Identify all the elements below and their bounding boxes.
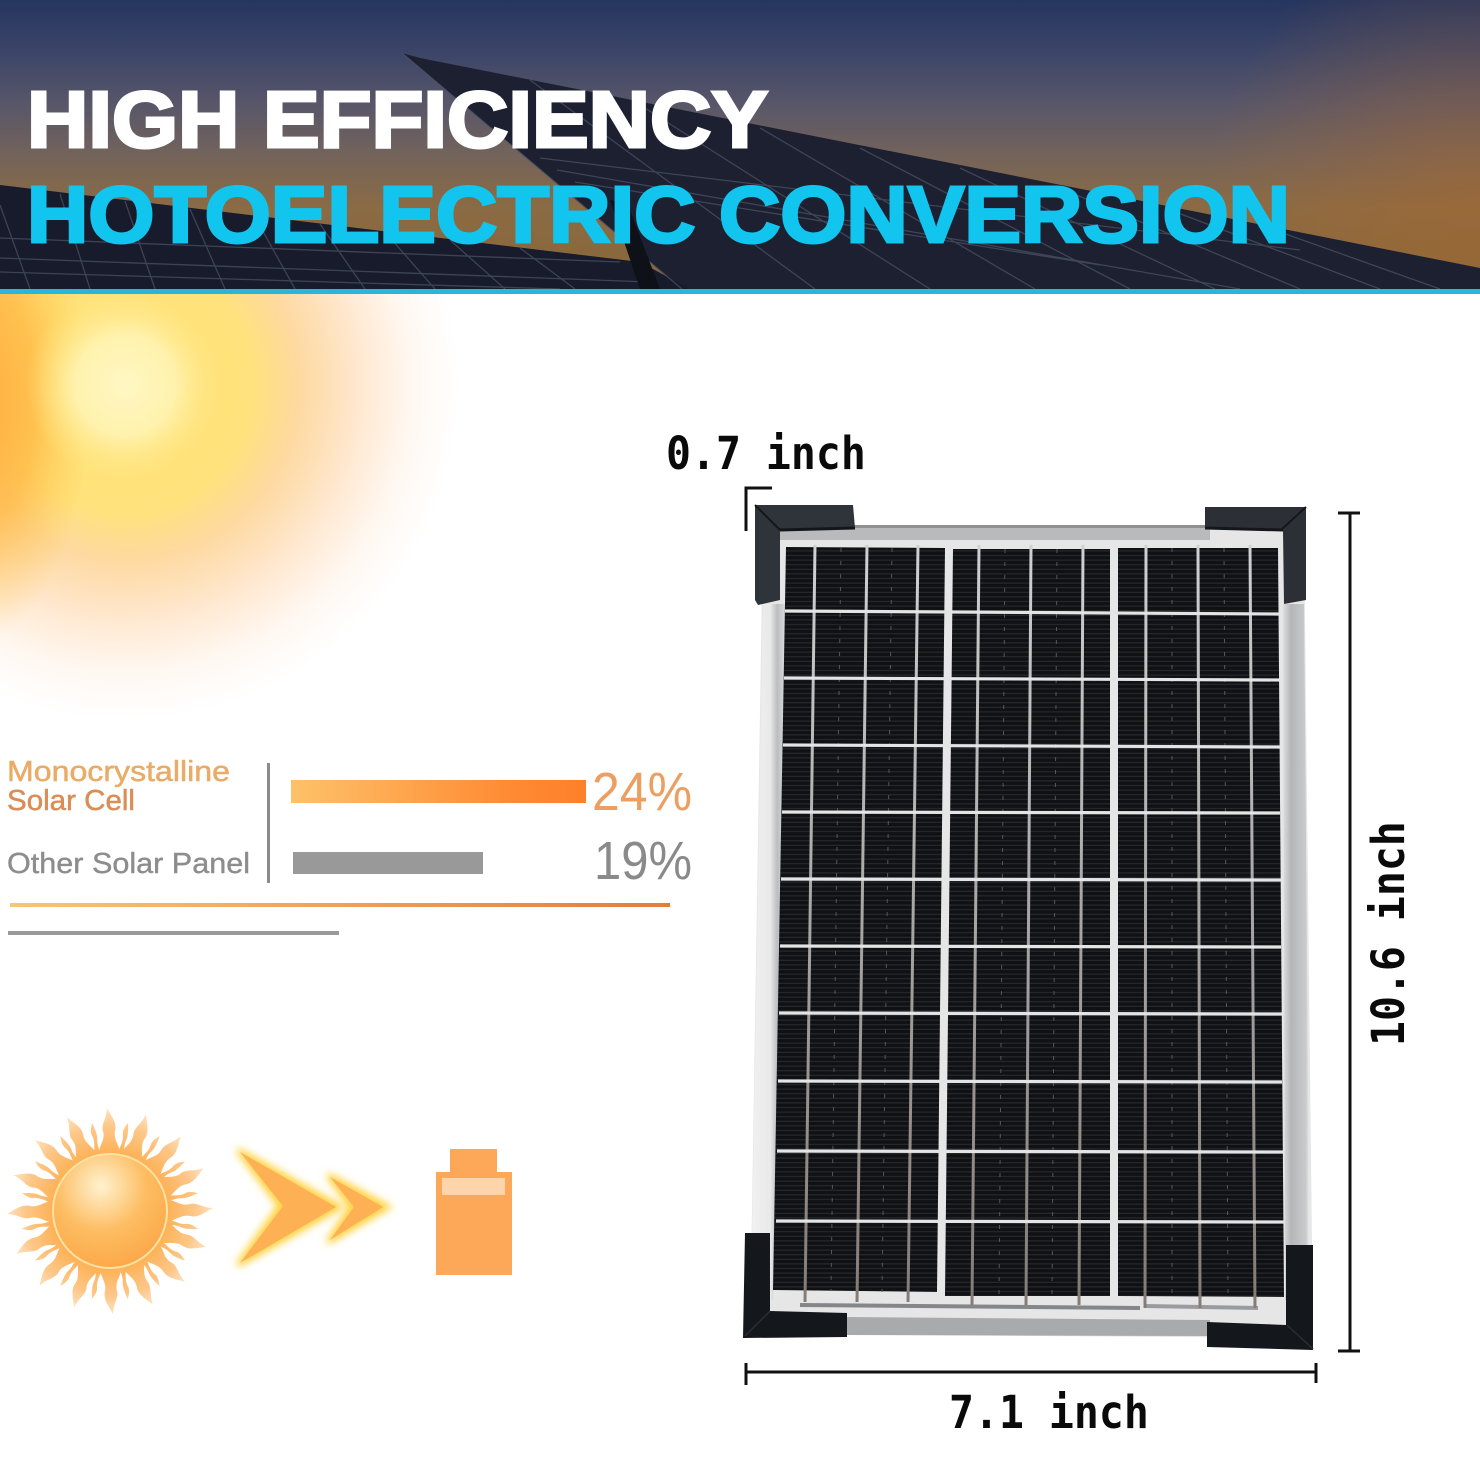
- value: 24%: 24%: [592, 762, 692, 822]
- sky background: [0, 0, 1480, 289]
- chart axis: [267, 763, 270, 883]
- dimension label: 10.6 inch: 10.6 inch: [1363, 821, 1416, 1046]
- corner bracket: bottom left: [743, 1233, 847, 1338]
- dimension: height line: [1338, 513, 1360, 1351]
- icon: sun: [7, 1108, 213, 1314]
- header banner: [0, 0, 1480, 289]
- label: monocrystalline: Monocrystalline: [7, 756, 230, 788]
- header cyan rule: [0, 289, 1480, 294]
- corner bracket: top right: [1205, 507, 1306, 604]
- corner bracket: bottom right: [1207, 1245, 1313, 1350]
- panel frame: [750, 525, 1313, 1338]
- value: 19%: 19%: [594, 831, 692, 891]
- bar: monocrystalline: [291, 780, 586, 803]
- underline: gray: [8, 931, 339, 935]
- solar array silhouettes: [0, 53, 1480, 289]
- icon: battery: [436, 1149, 512, 1275]
- dimension label: 0.7 inch: 0.7 inch: [666, 428, 866, 481]
- busbars: [805, 545, 1255, 1308]
- label: solar cell: Solar Cell: [7, 785, 135, 817]
- photovoltaic cells: [773, 547, 1284, 1297]
- dimension label: 7.1 inch: 7.1 inch: [949, 1387, 1149, 1440]
- dimension: thickness bracket: [746, 488, 772, 531]
- solar panel photo: [743, 505, 1313, 1350]
- cell separators: [776, 611, 1284, 1222]
- dimension: width line: [746, 1363, 1316, 1385]
- corner bracket: top left: [755, 505, 855, 605]
- efficiency comparison chart: [7, 756, 692, 935]
- title line 1: HIGH EFFICIENCY: [27, 75, 768, 164]
- cell fingers: [831, 548, 1228, 1296]
- label: other solar panel: Other Solar Panel: [7, 848, 250, 880]
- bar: other panel: [293, 852, 483, 874]
- underline: orange: [10, 903, 670, 907]
- sun glow: [0, 294, 430, 690]
- icon: arrows: [238, 1150, 388, 1265]
- title line 2: HOTOELECTRIC CONVERSION: [27, 170, 1290, 259]
